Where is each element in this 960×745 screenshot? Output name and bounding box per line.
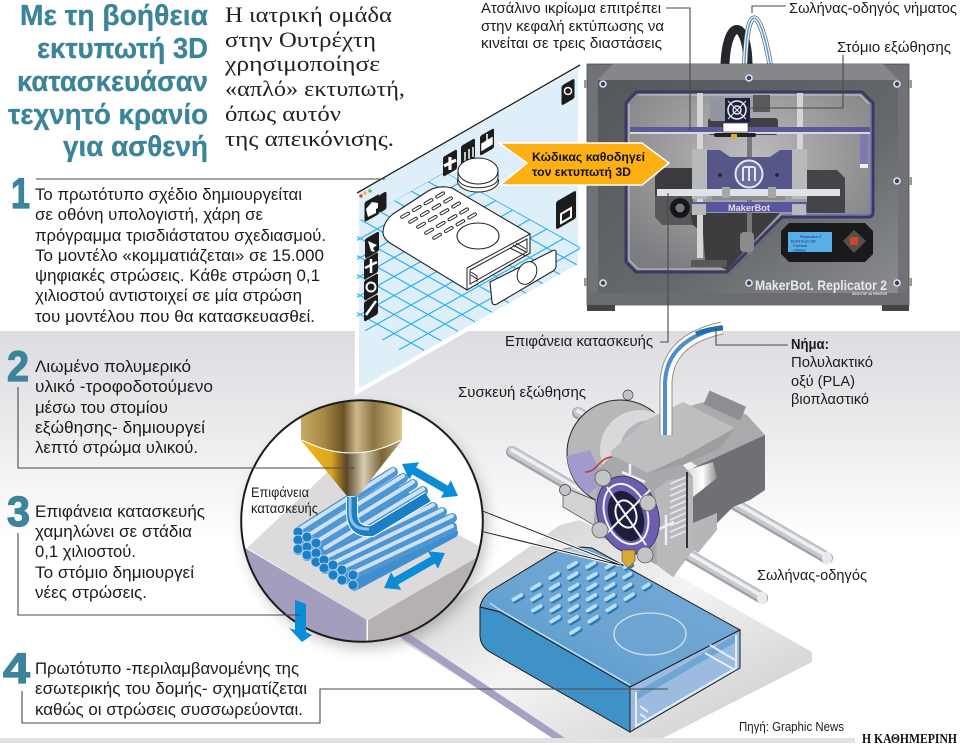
step 4: εσωτερικής του δομής- σχηματίζεται bbox=[35, 680, 307, 698]
step 2: λεπτό στρώμα υλικού. bbox=[35, 439, 198, 457]
panel: computer screen with 3D model bbox=[355, 64, 580, 396]
intro text bbox=[224, 2, 405, 151]
filament tubes on top bbox=[725, 18, 770, 64]
lower rod layers bbox=[298, 490, 453, 586]
intro text: Η ιατρική ομάδα bbox=[225, 2, 393, 27]
label: filament guide tube: Σωλήνας-οδηγός νήματος bbox=[789, 0, 957, 17]
step 2: 2 bbox=[7, 343, 29, 391]
stepper motor bbox=[660, 390, 765, 533]
step 3 bbox=[7, 488, 205, 602]
printer interior bbox=[630, 93, 870, 270]
label: filament: Νήμα: bbox=[791, 336, 829, 353]
intro text: όπως αυτόν bbox=[225, 101, 341, 126]
background gradient band bbox=[0, 331, 960, 541]
label: filament: βιοπλαστικό bbox=[791, 391, 869, 408]
filament layers bbox=[298, 470, 453, 586]
label: steel frame: κινείται σε τρεις διαστάσεις bbox=[481, 35, 662, 52]
step 1: χιλιοστού αντιστοιχεί σε μία στρώση bbox=[35, 287, 302, 305]
movement arrow lower bbox=[384, 551, 445, 590]
print head bbox=[710, 97, 756, 140]
callout arrow: code guides printer bbox=[499, 143, 669, 185]
front block bbox=[593, 455, 717, 577]
step 3: χαμηλώνει σε στάδια bbox=[35, 523, 192, 541]
guide rods bbox=[512, 411, 827, 598]
model lid part bbox=[490, 250, 556, 305]
fan bbox=[586, 467, 670, 563]
control panel: Replicator 2 bbox=[800, 234, 822, 239]
step 2 bbox=[7, 343, 213, 457]
step 4: Πρωτότυπο -περιλαμβανομένης της bbox=[35, 660, 299, 678]
step 2: υλικό -τροφοδοτούμενο bbox=[35, 378, 213, 396]
printer window bbox=[626, 92, 873, 272]
step 3: 3 bbox=[7, 488, 30, 536]
step 3: νέες στρώσεις. bbox=[35, 584, 147, 602]
movement arrow upper bbox=[402, 462, 458, 498]
label: steel frame: στην κεφαλή εκτύπωσης να bbox=[481, 18, 664, 35]
step 2: εξώθησης- δημιουργεί bbox=[35, 419, 205, 437]
down arrow bbox=[289, 600, 312, 642]
step 1: Το μοντέλο «κομματιάζεται» σε 15.000 bbox=[35, 247, 324, 265]
surface label in circle: κατασκευής bbox=[251, 501, 318, 516]
step 1 bbox=[11, 170, 326, 326]
label: steel frame bbox=[481, 0, 664, 52]
control panel: Build from SD bbox=[791, 238, 816, 244]
label: extrusion device: Συσκευή εξώθησης bbox=[458, 384, 586, 401]
step 2: μέσω του στομίου bbox=[35, 399, 168, 417]
control panel: Preheat bbox=[793, 243, 808, 248]
title: για ασθενή bbox=[63, 131, 208, 163]
label: steel frame: Ατσάλινο ικρίωμα επιτρέπει bbox=[481, 0, 661, 17]
top rods right group bbox=[324, 505, 452, 575]
source: Πηγή: Graphic News bbox=[739, 720, 844, 734]
printer screws bbox=[600, 75, 900, 286]
callout arrow: code guides printer: τον εκτυπωτή 3D bbox=[532, 165, 631, 179]
step 3: Επιφάνεια κατασκευής bbox=[35, 503, 205, 521]
window buttons bbox=[359, 189, 372, 198]
panel: printer front view bbox=[584, 18, 912, 311]
label: build surface: Επιφάνεια κατασκευής bbox=[505, 333, 653, 350]
control panel: Utilities bbox=[793, 248, 806, 252]
intro text: της απεικόνισης. bbox=[225, 126, 394, 151]
step 1: ψηφιακές στρώσεις. Κάθε στρώση 0,1 bbox=[35, 267, 320, 285]
label: filament: οξύ (PLA) bbox=[791, 373, 855, 390]
step 1: Το πρωτότυπο σχέδιο δημιουργείται bbox=[35, 186, 302, 204]
printer brand text: MakerBot. Replicator 2 bbox=[755, 277, 887, 293]
step 3: Το στόμιο δημιουργεί bbox=[35, 564, 194, 582]
red wire bbox=[585, 457, 612, 472]
magnifier connector lines bbox=[480, 510, 620, 565]
filament tube bbox=[665, 327, 723, 435]
step 1: πρόγραμμα τρισδιάστατου σχεδιασμού. bbox=[35, 227, 326, 245]
title: Με τη βοήθεια bbox=[20, 0, 208, 32]
fan screws bbox=[592, 470, 656, 563]
intro text: «απλό» εκτυπωτή, bbox=[225, 76, 405, 101]
step 4: καθώς οι στρώσεις συσσωρεύονται. bbox=[35, 701, 303, 719]
title bbox=[8, 0, 208, 163]
label: guide rod: Σωλήνας-οδηγός bbox=[757, 567, 867, 584]
toolbar icons bbox=[364, 78, 576, 322]
top plate bbox=[610, 402, 735, 473]
step 4 bbox=[3, 645, 307, 719]
rod ends bbox=[293, 527, 358, 590]
step 2: Λιωμένο πολυμερικό bbox=[35, 358, 191, 376]
model dome part bbox=[458, 158, 498, 192]
label: filament bbox=[791, 336, 873, 408]
step 1: 1 bbox=[11, 170, 30, 218]
footer strip bbox=[0, 738, 855, 743]
panel: build plate with printed model bbox=[397, 520, 812, 738]
3D model on screen bbox=[383, 187, 530, 290]
surface label in circle bbox=[251, 485, 318, 516]
title: εκτυπωτή 3D bbox=[37, 33, 208, 65]
extrusion device illustration bbox=[512, 390, 832, 604]
control panel bbox=[781, 223, 873, 262]
printer brand text: DESKTOP 3D PRINTER bbox=[852, 291, 887, 296]
build platform bbox=[657, 149, 840, 218]
build platform: MakerBot bbox=[728, 203, 770, 213]
step 3: 0,1 χιλιοστού. bbox=[35, 543, 136, 561]
top rods left group bbox=[298, 470, 423, 550]
label: filament: Πολυλακτικό bbox=[791, 354, 873, 371]
surface label in circle: Επιφάνεια bbox=[251, 485, 309, 500]
printed prototype model bbox=[480, 547, 740, 732]
intro text: στην Ουτρέχτη bbox=[225, 27, 376, 52]
step 1: σε οθόνη υπολογιστή, χάρη σε bbox=[35, 206, 264, 224]
title: τεχνητό κρανίο bbox=[8, 99, 208, 131]
extruder nozzle bbox=[622, 550, 635, 568]
model ventilation holes bbox=[514, 563, 650, 634]
title: κατασκευάσαν bbox=[17, 66, 208, 98]
label: extrusion nozzle: Στόμιο εξώθησης bbox=[837, 39, 951, 56]
intro text: χρησιμοποίησε bbox=[224, 51, 380, 76]
callout arrow: code guides printer: Κώδικας καθοδηγεί bbox=[532, 150, 645, 164]
magnifier circle detail bbox=[240, 400, 490, 650]
extruded strand bbox=[352, 497, 428, 531]
step 4: 4 bbox=[3, 645, 30, 693]
rear disc bbox=[560, 390, 680, 527]
nozzle bbox=[301, 400, 402, 496]
step 1: του μοντέλου που θα κατασκευασθεί. bbox=[35, 308, 315, 326]
